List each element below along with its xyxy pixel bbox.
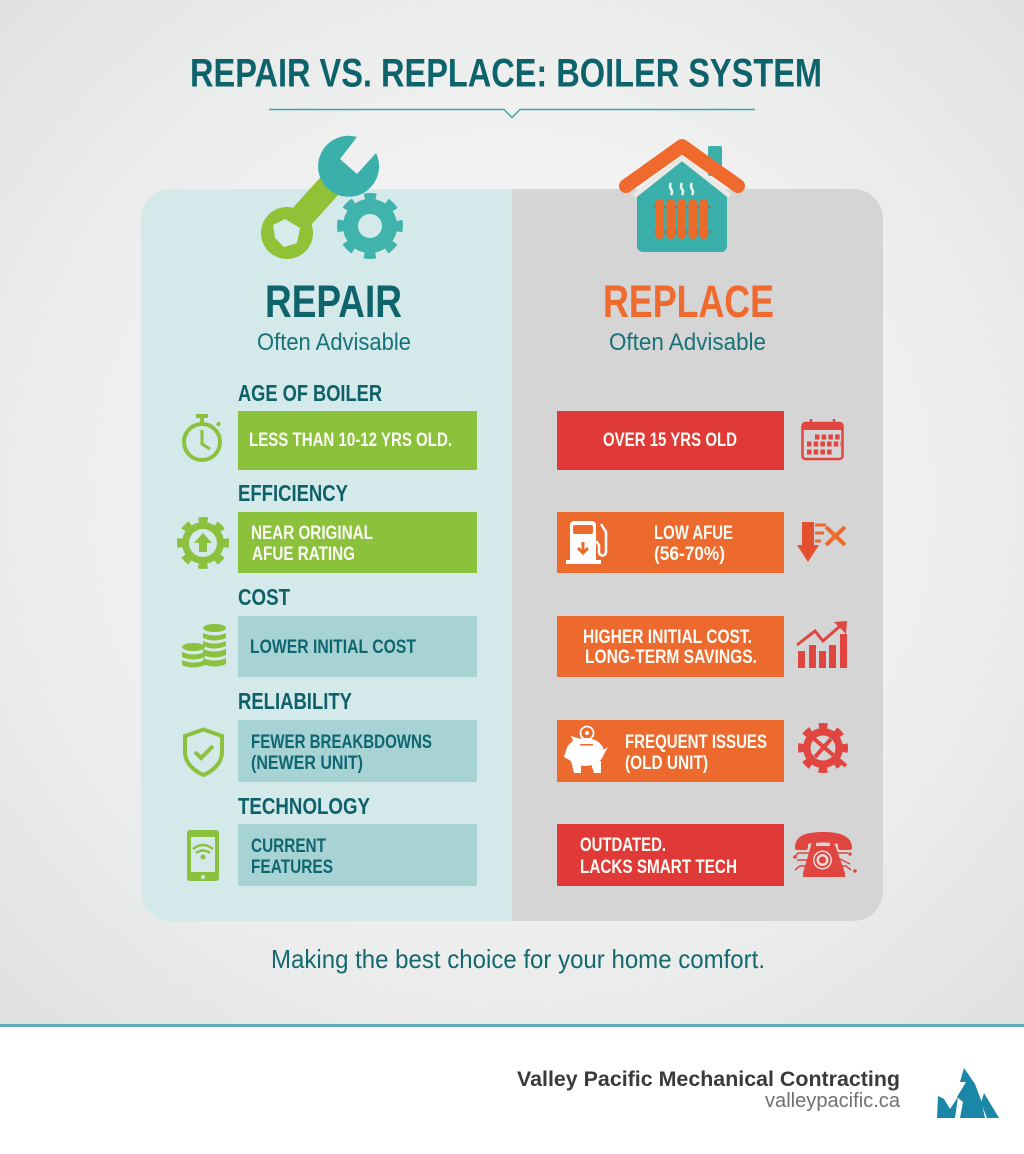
box text line 2: LACKS SMART TECH [580, 857, 737, 878]
icon: smartphone with wifi [187, 830, 219, 881]
icon: fuel pump [566, 521, 606, 564]
box text: NEAR ORIGINAL [251, 523, 373, 544]
row: reliability [185, 688, 477, 782]
box text: CURRENT [251, 836, 326, 857]
footer [0, 1024, 1024, 1154]
icon: falling efficiency arrow [797, 522, 845, 562]
box: over 15 yrs old [557, 411, 784, 470]
box text: FREQUENT ISSUES [625, 732, 767, 753]
box text: OVER 15 YRS OLD [603, 430, 737, 451]
row: efficiency [180, 480, 477, 573]
box text line 2: (56-70%) [654, 544, 725, 565]
row: outdated [557, 824, 857, 886]
box text line 2: AFUE RATING [252, 544, 355, 565]
row: cost [182, 584, 477, 677]
caption: Making the best choice for your home comfort. [271, 944, 765, 974]
subheading: often advisable: Often Advisable [257, 329, 411, 356]
box text line 2: (NEWER UNIT) [251, 753, 363, 774]
box text: LOWER INITIAL COST [250, 637, 416, 658]
icon: coin stacks [182, 624, 226, 668]
icon: stopwatch [184, 416, 220, 460]
icon: gear with up arrow [180, 520, 226, 566]
box text: HIGHER INITIAL COST. [583, 627, 752, 648]
box text line 2: (OLD UNIT) [625, 753, 708, 774]
box: less than 10-12 yrs [238, 411, 477, 470]
website: valleypacific.ca [765, 1090, 901, 1112]
box text: LOW AFUE [654, 523, 733, 544]
row: frequent issues [557, 720, 846, 782]
icon: calendar [802, 419, 842, 459]
label: age of boiler: AGE OF BOILER [238, 380, 382, 406]
panel: repair [141, 136, 512, 921]
box text line 2: LONG-TERM SAVINGS. [585, 647, 757, 668]
label: cost: COST [238, 584, 290, 610]
box text line 2: FEATURES [251, 857, 333, 878]
row: technology [187, 793, 477, 886]
panel: replace [512, 146, 883, 921]
logo: mountains [937, 1068, 999, 1118]
company name: Valley Pacific Mechanical Contracting [517, 1068, 900, 1091]
title underline with notch [269, 110, 755, 118]
box: higher initial cost [557, 616, 784, 677]
heading: repair: REPAIR [265, 276, 402, 327]
icon: shield with check [185, 730, 222, 775]
label: reliability: RELIABILITY [238, 688, 352, 714]
heading: replace: REPLACE [603, 276, 774, 327]
label: efficiency: EFFICIENCY [238, 480, 348, 506]
box: low afue [557, 512, 784, 573]
icon: wrench and gear [261, 136, 400, 259]
row: age of boiler [184, 380, 477, 470]
box: current features [238, 824, 477, 886]
box: near original afue [238, 512, 477, 573]
box: lower initial cost [238, 616, 477, 677]
icon: house with radiator [626, 146, 738, 252]
row: low afue [557, 512, 845, 573]
row: higher initial cost [557, 616, 847, 677]
icon: rising bar chart [797, 621, 847, 668]
title: REPAIR VS. REPLACE: BOILER SYSTEM [190, 52, 822, 96]
box: frequent issues [557, 720, 784, 782]
icon: broken gear [801, 726, 846, 770]
box text: LESS THAN 10-12 YRS OLD. [249, 430, 452, 451]
subheading: often advisable: Often Advisable [609, 329, 766, 356]
box text: OUTDATED. [580, 835, 666, 856]
label: technology: TECHNOLOGY [238, 793, 370, 819]
box: outdated [557, 824, 784, 886]
icon: rotary telephone [793, 832, 857, 877]
icon: piggy bank [564, 726, 608, 773]
box: fewer breakdowns [238, 720, 477, 782]
box text: FEWER BREAKBDOWNS [251, 732, 432, 753]
row: over 15 yrs [557, 411, 842, 470]
